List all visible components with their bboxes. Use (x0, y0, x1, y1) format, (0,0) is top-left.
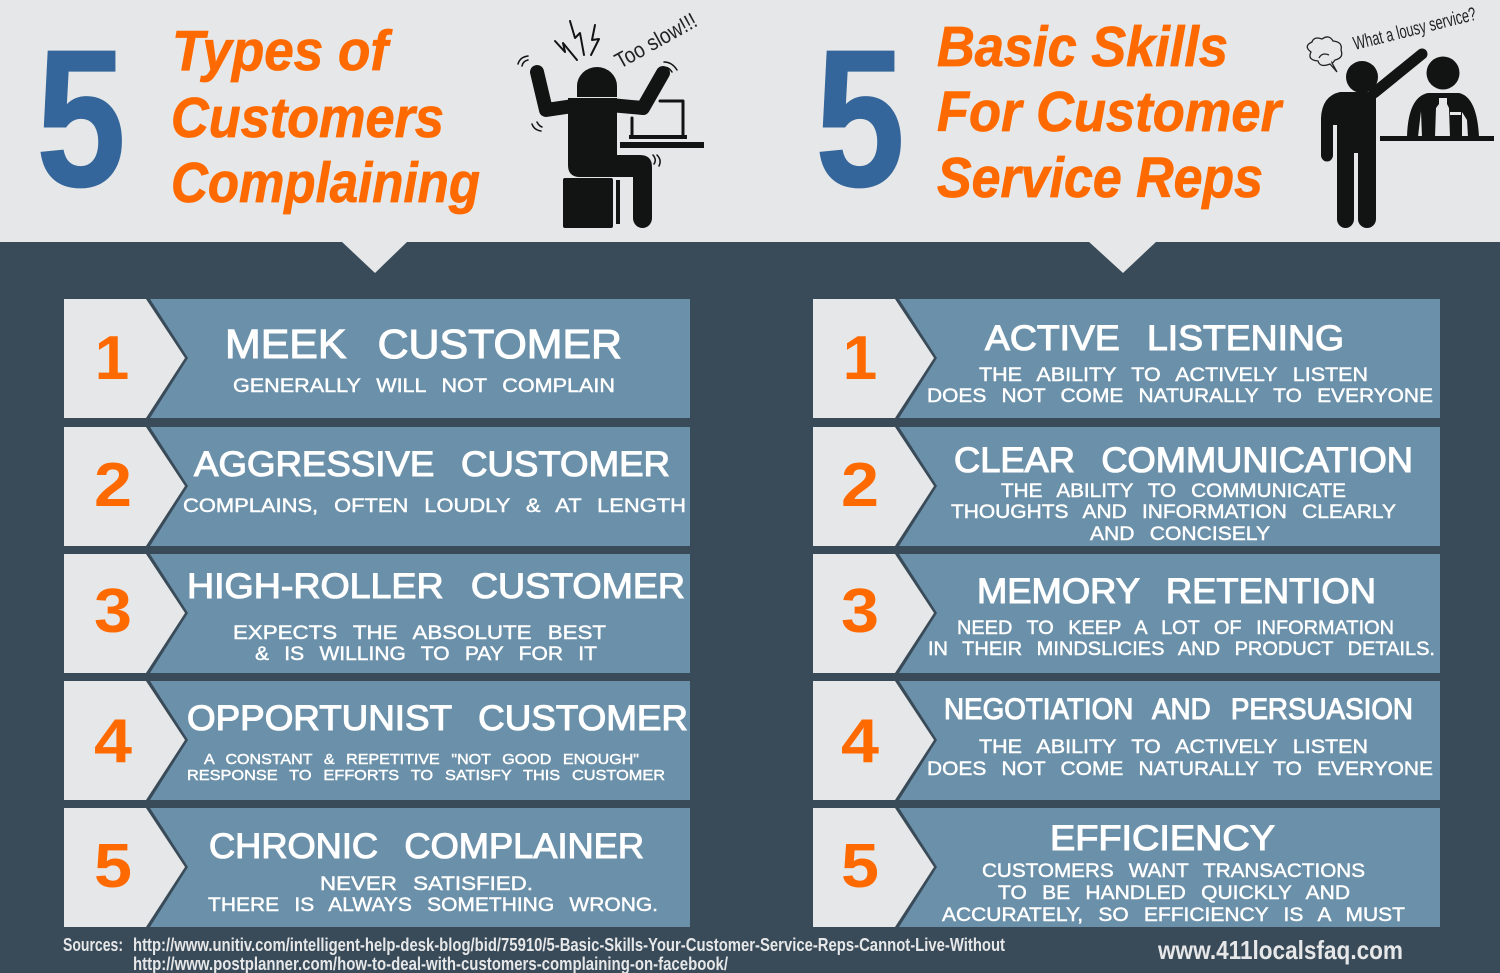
icon: frustrated person at laptop: Too slow!!! (610, 8, 701, 73)
left title: Types of (172, 19, 393, 83)
icon: frustrated person at laptop (518, 8, 704, 228)
row: aggressive customer (64, 427, 690, 546)
row: chronic complainer: NEVER SATISFIED. (320, 874, 533, 895)
row: memory retention: 3 (841, 577, 879, 646)
left heading: 5 Types of Customers Complaining (36, 9, 480, 228)
row: high-roller customer (64, 554, 690, 673)
right title (937, 15, 1284, 210)
row: efficiency: ACCURATELY, SO EFFICIENCY IS A MUST (942, 905, 1405, 926)
sources footer: http://www.unitiv.com/intelligent-help-desk-blog/bid/75910/5-Basic-Skills-Your-Customer-Service-Reps-Cannot-Live-Without (133, 935, 1005, 955)
right title: Basic Skills (937, 15, 1228, 79)
left title: Customers (171, 86, 444, 150)
row: clear communication (813, 427, 1440, 546)
row: opportunist customer: 4 (94, 707, 133, 776)
row: meek customer (64, 299, 690, 418)
row: efficiency: CUSTOMERS WANT TRANSACTIONS (982, 861, 1365, 882)
sources footer (63, 935, 1005, 973)
icon: customer complaining to service rep (1307, 4, 1494, 228)
row: active listening (813, 299, 1440, 418)
row: negotiation and persuasion: 4 (841, 707, 880, 776)
row: meek customer: 1 (95, 324, 129, 393)
row: memory retention: IN THEIR MINDSLICIES AND PRODUCT DETAILS. (928, 639, 1435, 660)
row: meek customer: MEEK CUSTOMER (225, 321, 622, 367)
row: active listening: DOES NOT COME NATURALLY TO EVERYONE (927, 386, 1433, 407)
right heading: 5 Basic Skills For Customer Service Reps (815, 9, 1284, 228)
panel: left list of customer types (64, 299, 690, 927)
left title: Complaining (171, 151, 480, 215)
row: efficiency: EFFICIENCY (1050, 819, 1275, 858)
row: clear communication: CLEAR COMMUNICATION (954, 441, 1413, 480)
row: negotiation and persuasion (813, 681, 1440, 800)
header band (0, 0, 1500, 273)
row: negotiation and persuasion: NEGOTIATION AND PERSUASION (944, 693, 1413, 726)
row: memory retention: NEED TO KEEP A LOT OF INFORMATION (957, 618, 1394, 639)
row: high-roller customer: & IS WILLING TO PAY FOR IT (255, 644, 597, 665)
row: high-roller customer: 3 (94, 577, 132, 646)
row: efficiency: 5 (841, 832, 879, 901)
row: negotiation and persuasion: THE ABILITY TO ACTIVELY LISTEN (979, 737, 1368, 758)
row: meek customer: GENERALLY WILL NOT COMPLAIN (233, 376, 615, 397)
big numeral 5 left: 5 (36, 9, 126, 228)
row: active listening: THE ABILITY TO ACTIVELY LISTEN (979, 365, 1368, 386)
row: clear communication: THOUGHTS AND INFORMATION CLEARLY (951, 502, 1396, 523)
row: opportunist customer: A CONSTANT & REPETITIVE "NOT GOOD ENOUGH" (204, 751, 639, 768)
row: clear communication: 2 (841, 451, 879, 520)
row: high-roller customer: HIGH-ROLLER CUSTOMER (187, 567, 685, 606)
row: aggressive customer: COMPLAINS, OFTEN LOUDLY & AT LENGTH (183, 496, 686, 517)
sources footer: Sources: (63, 935, 123, 955)
row: chronic complainer: THERE IS ALWAYS SOMETHING WRONG. (208, 895, 658, 916)
row: chronic complainer: CHRONIC COMPLAINER (209, 827, 644, 866)
row: active listening: ACTIVE LISTENING (985, 319, 1344, 358)
left title (171, 19, 480, 215)
website credit: www.411localsfaq.com (1157, 935, 1403, 965)
right title: Service Reps (937, 146, 1263, 210)
row: chronic complainer: 5 (94, 832, 132, 901)
row: efficiency: TO BE HANDLED QUICKLY AND (998, 883, 1350, 904)
row: aggressive customer: AGGRESSIVE CUSTOMER (194, 445, 670, 484)
right title: For Customer (937, 80, 1284, 144)
row: efficiency (813, 808, 1440, 927)
row: active listening: 1 (843, 324, 877, 393)
row: clear communication: THE ABILITY TO COMMUNICATE (1001, 481, 1346, 502)
row: opportunist customer (64, 681, 690, 800)
row: high-roller customer: EXPECTS THE ABSOLUTE BEST (233, 623, 606, 644)
row: memory retention: MEMORY RETENTION (977, 572, 1376, 611)
row: opportunist customer: RESPONSE TO EFFORTS TO SATISFY THIS CUSTOMER (187, 767, 665, 784)
row: memory retention (813, 554, 1440, 673)
big numeral 5 right: 5 (815, 9, 905, 228)
panel: right list of skills (813, 299, 1440, 927)
row: clear communication: AND CONCISELY (1090, 524, 1270, 545)
row: chronic complainer (64, 808, 690, 927)
row: opportunist customer: OPPORTUNIST CUSTOMER (187, 699, 688, 738)
row: negotiation and persuasion: DOES NOT COME NATURALLY TO EVERYONE (927, 759, 1433, 780)
row: aggressive customer: 2 (94, 451, 132, 520)
